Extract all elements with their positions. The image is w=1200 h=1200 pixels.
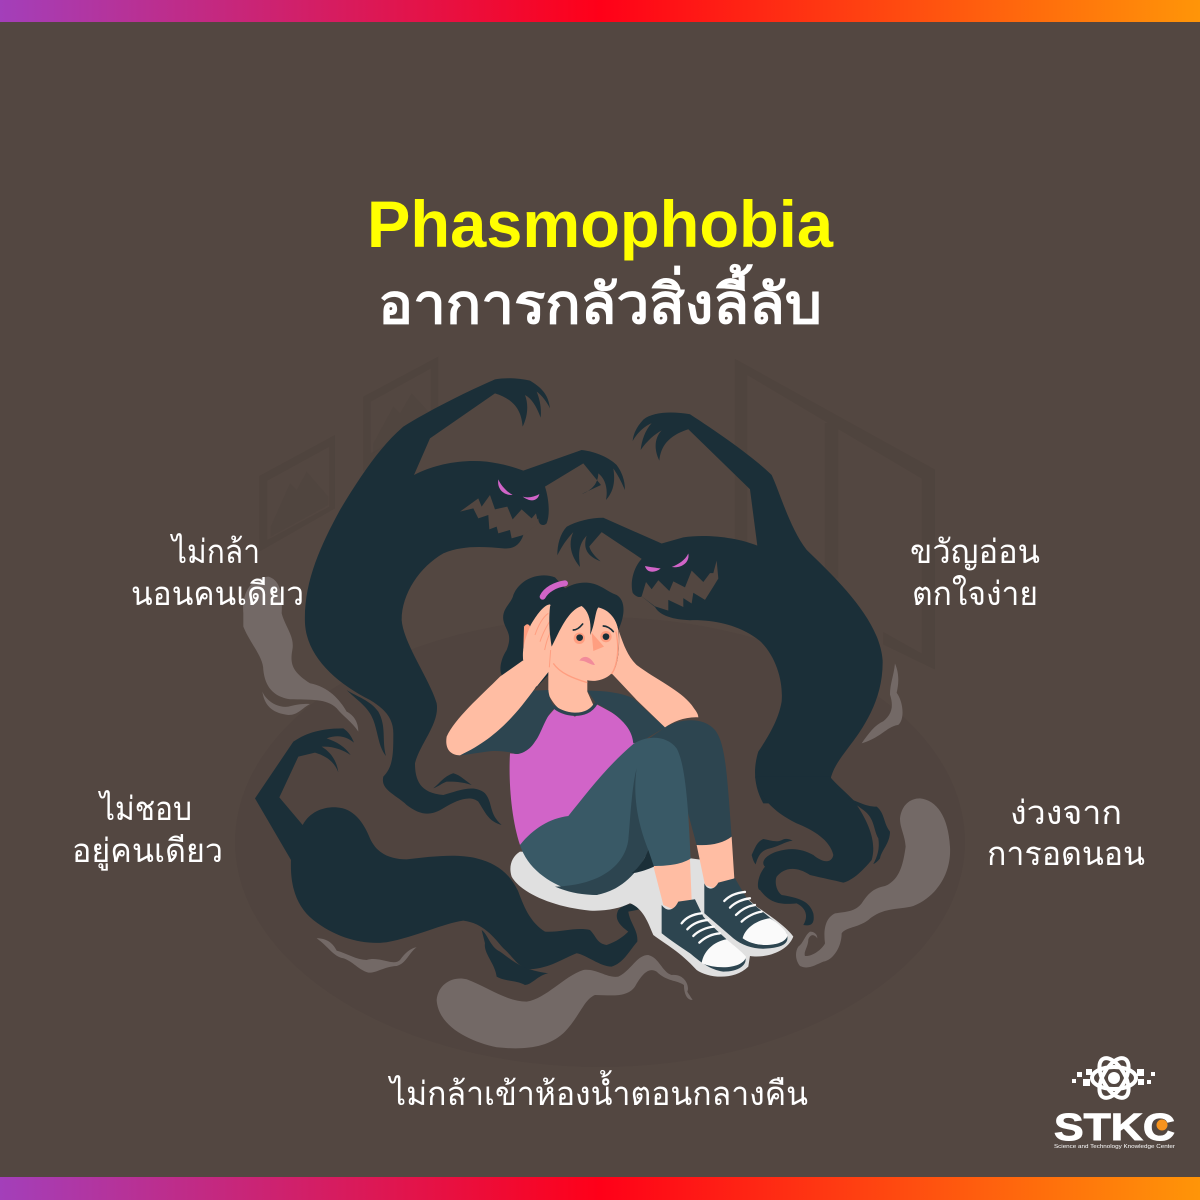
ghost eyes	[498, 479, 539, 500]
seated frightened girl	[446, 575, 793, 977]
label: bottom: ไม่กล้าเข้าห้องน้ำตอนกลางคืน	[387, 1070, 808, 1112]
under-leg shadow	[632, 850, 654, 873]
left shoe	[662, 899, 746, 972]
mouth	[579, 657, 595, 665]
shirt	[510, 703, 635, 845]
thigh shadow	[555, 768, 648, 895]
label: middle right: การอดนอน	[987, 835, 1145, 872]
label: top left: นอนคนเดียว	[131, 575, 304, 612]
ghost mouth teeth gap	[642, 561, 718, 611]
front leg	[520, 738, 691, 895]
label: middle left: อยู่คนเดียว	[72, 832, 223, 871]
front hair	[549, 583, 624, 647]
logo tagline: Science and Technology Knowledge Center	[1054, 1144, 1175, 1150]
left lower leg	[653, 859, 692, 912]
hair tie	[543, 583, 565, 597]
label: top right: ขวัญอ่อน	[910, 533, 1040, 570]
label: top right	[910, 533, 1040, 612]
right sleeve	[587, 691, 665, 743]
face	[549, 605, 619, 681]
nose	[592, 633, 604, 651]
ear	[523, 624, 531, 650]
right shoe	[704, 878, 787, 949]
wall picture frames and window	[259, 357, 935, 670]
top gradient bar	[0, 0, 1200, 22]
logo atom icon	[1092, 1053, 1136, 1103]
title	[367, 187, 834, 335]
shoelaces	[682, 892, 762, 943]
floor ellipse	[235, 617, 965, 1067]
label: top left: ไม่กล้า	[169, 533, 260, 570]
logo pixel dots	[1072, 1069, 1155, 1086]
STKC logo	[1054, 1053, 1175, 1150]
right lower leg	[697, 837, 734, 890]
label: middle right: ง่วงจาก	[1010, 794, 1122, 831]
neck	[548, 653, 593, 716]
ghost eyes	[645, 553, 689, 572]
label: middle left	[72, 790, 223, 871]
seat shadow	[510, 852, 793, 977]
label: top left	[131, 533, 304, 612]
jawline	[553, 632, 618, 683]
smoke wisps	[243, 577, 950, 1048]
ghost: lower left	[255, 728, 645, 985]
left sleeve	[457, 690, 555, 756]
left arm	[446, 661, 548, 755]
title: Phasmophobia	[367, 187, 834, 261]
label: middle left: ไม่ชอบ	[97, 790, 192, 827]
logo wordmark: STKC	[1054, 1107, 1175, 1149]
back leg	[647, 720, 732, 845]
right arm	[612, 632, 698, 727]
bottom gradient bar	[0, 1177, 1200, 1200]
left hand	[523, 604, 556, 687]
ghost mouth teeth gap	[460, 495, 538, 538]
back hair	[500, 575, 567, 691]
collar	[553, 703, 596, 714]
ghost: upper left	[305, 378, 625, 825]
eyes with dark circles	[573, 624, 613, 644]
title: อาการกลัวสิ่งลี้ลับ	[378, 264, 822, 335]
label: top right: ตกใจง่าย	[912, 575, 1038, 612]
label: middle right	[987, 794, 1145, 872]
ghost: right	[557, 413, 890, 925]
logo orange dot	[1156, 1120, 1168, 1130]
